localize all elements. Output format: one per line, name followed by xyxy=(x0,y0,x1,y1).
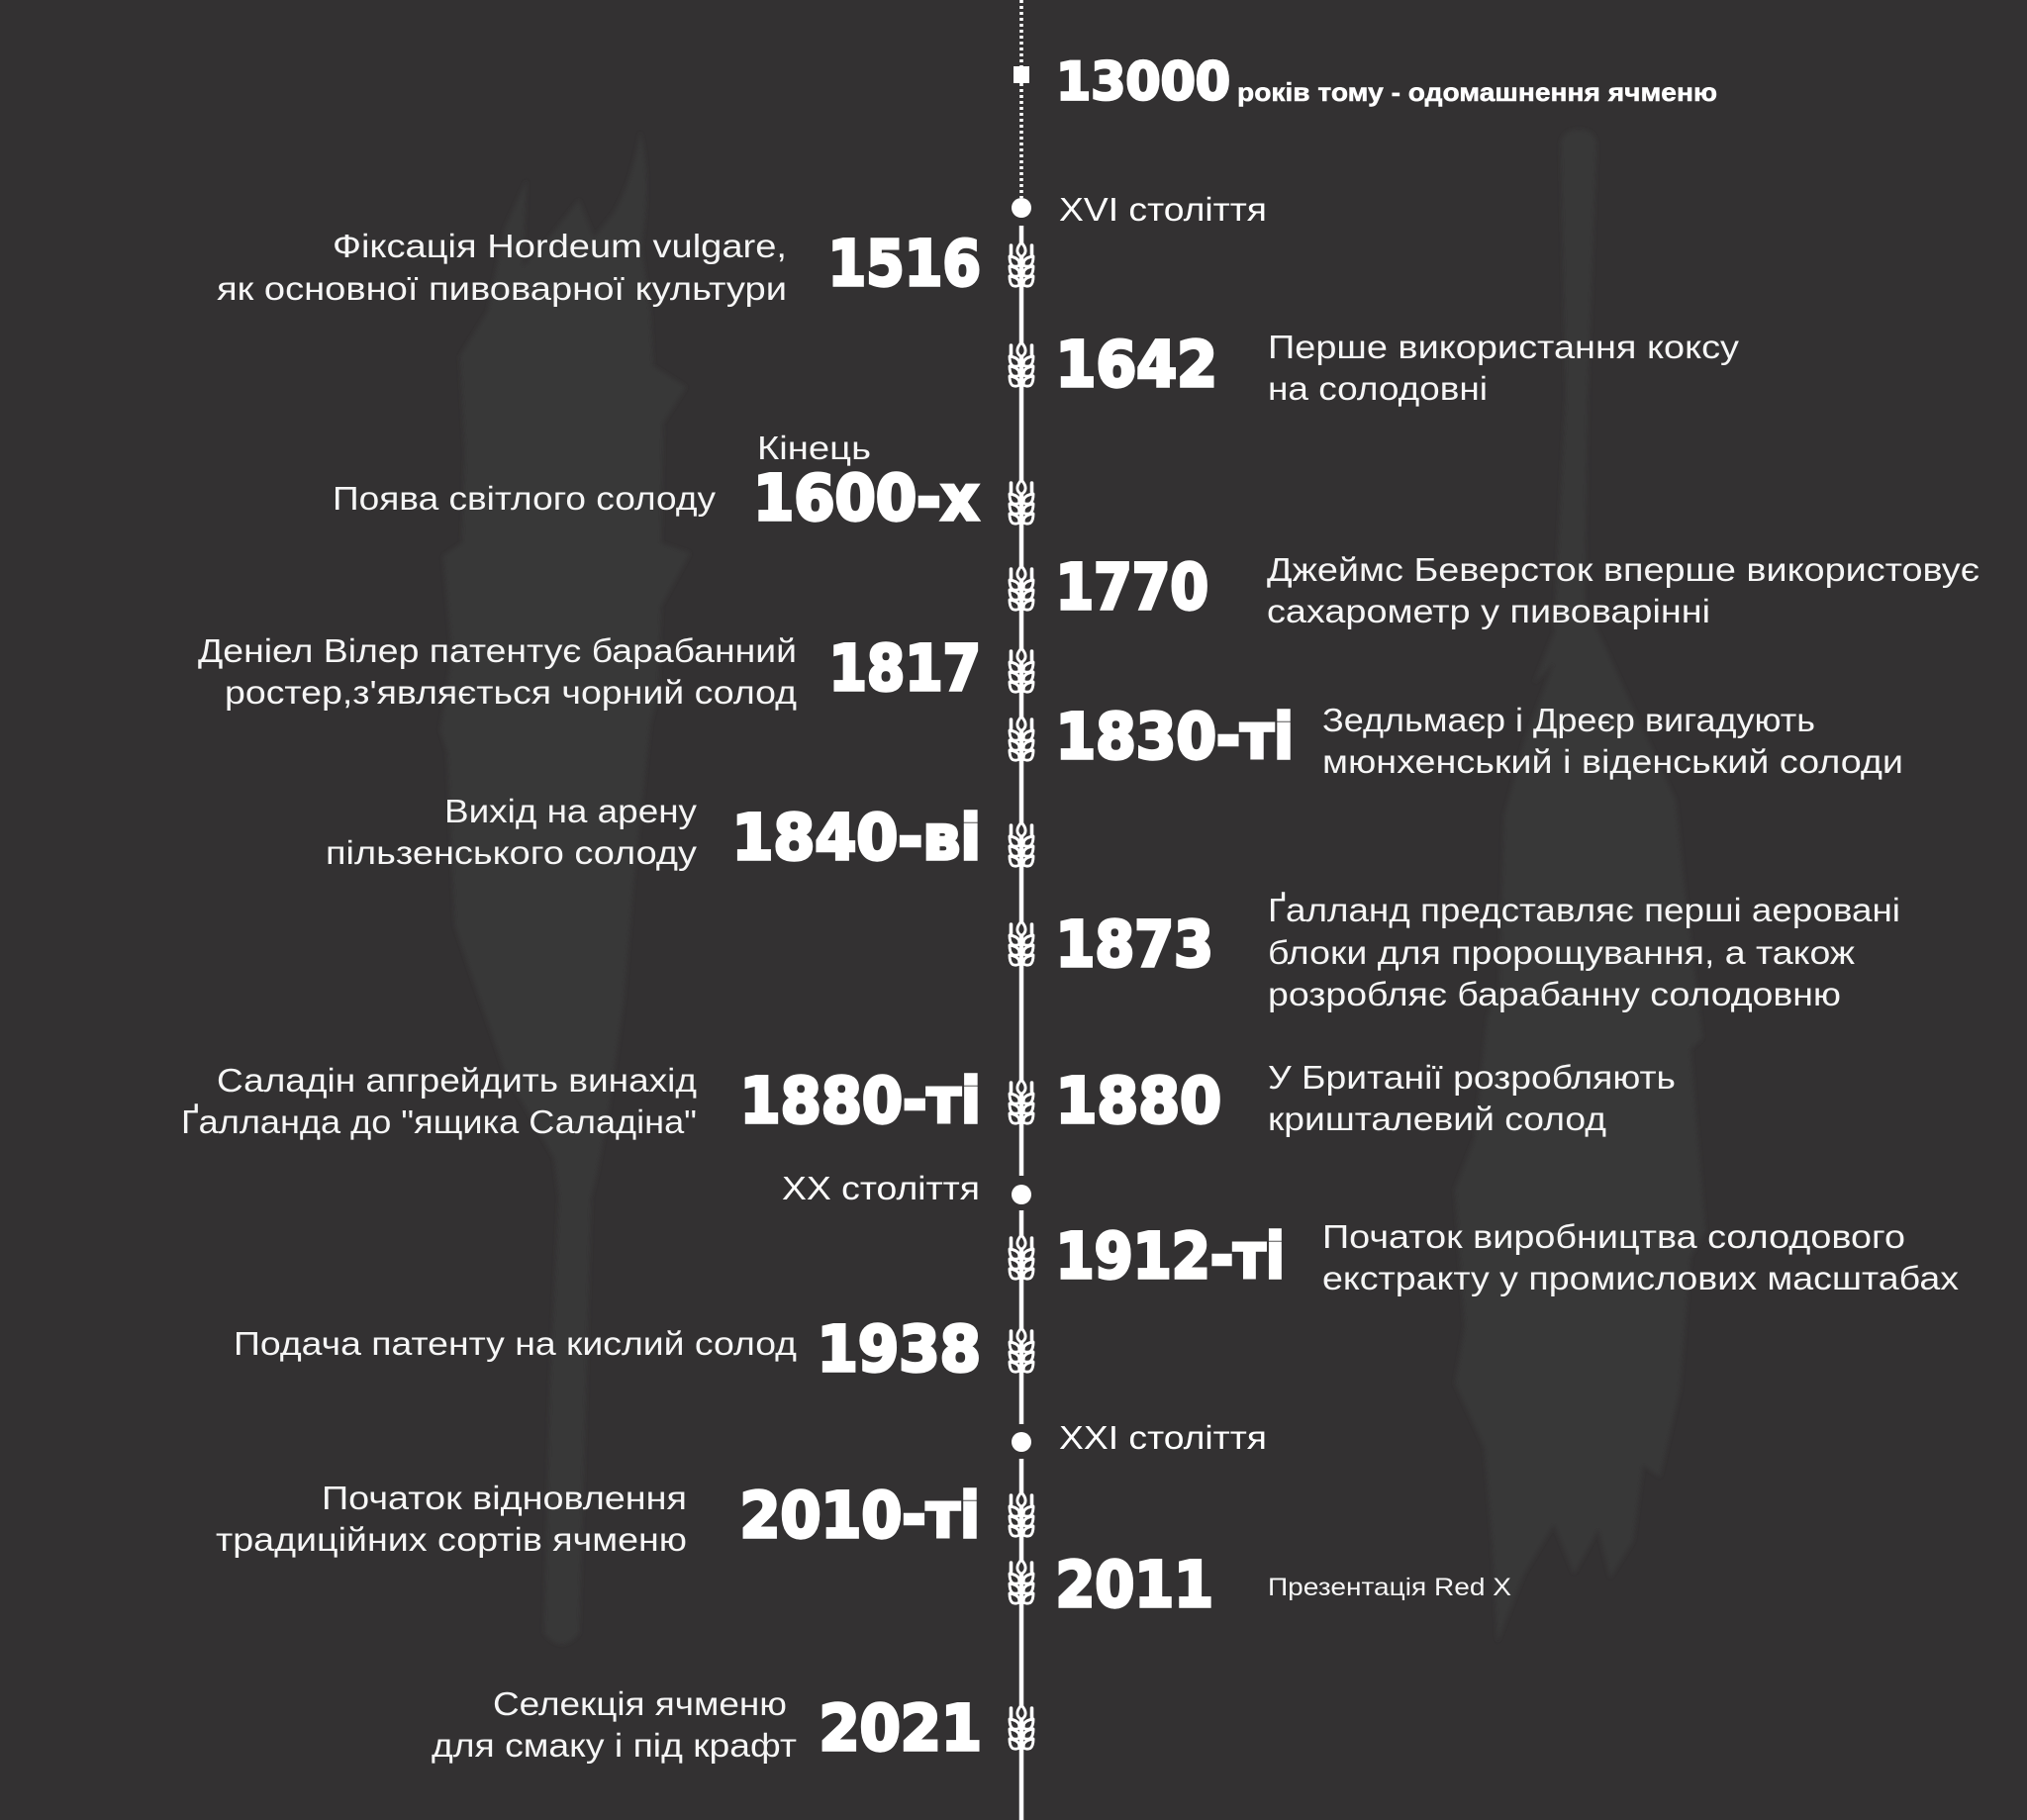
event: 1770: 1770 xyxy=(1055,551,1208,623)
event: 1880s and 1880 xyxy=(181,1059,1676,1140)
event: 1880s and 1880: кришталевий солод xyxy=(1268,1101,1606,1137)
event: 1840s xyxy=(326,793,1033,874)
event: 2021: 2021 xyxy=(820,1692,982,1765)
event: 1873: блоки для пророщування, а також xyxy=(1268,934,1855,971)
event: 1873: 1873 xyxy=(1055,909,1213,981)
century marker: XVI: XVI століття xyxy=(1059,191,1267,228)
decorative wheat ear, left xyxy=(440,132,690,1644)
event: 13000 years ago: років тому - одомашнення ячменю xyxy=(1237,77,1717,107)
event: 1873: розробляє барабанну солодовню xyxy=(1268,976,1841,1012)
event: 1770: Джеймс Беверсток вперше використовує xyxy=(1267,551,1979,588)
event: 1642 xyxy=(1010,329,1740,407)
event: 1912s xyxy=(1010,1218,1960,1296)
event: 1830s: 1830-ті xyxy=(1055,701,1294,773)
event: 2010s: 2010-ті xyxy=(740,1480,980,1552)
event: 1912s: Початок виробництва солодового xyxy=(1322,1218,1905,1255)
event: 1912s: 1912-ті xyxy=(1055,1220,1285,1293)
event: 2010s xyxy=(216,1480,1033,1558)
event: 1912s: екстракту у промислових масштабах xyxy=(1322,1260,1960,1296)
event: 2021: Селекція ячменю xyxy=(493,1685,787,1722)
event: 1840s: Вихід на арену xyxy=(444,793,698,829)
event: 2010s: традиційних сортів ячменю xyxy=(216,1521,687,1558)
event: 1880s and 1880: 1880-ті xyxy=(740,1065,981,1137)
event: 1642: Перше використання коксу xyxy=(1268,329,1740,365)
event: 1770 xyxy=(1010,551,1979,629)
event: late 1600s: Кінець xyxy=(757,430,871,466)
event: 1770: сахарометр у пивоварінні xyxy=(1267,593,1710,629)
event: 1817: 1817 xyxy=(829,632,981,705)
century marker: XXI: XXI століття xyxy=(1059,1419,1267,1456)
event: 13000 years ago: 13000 xyxy=(1056,51,1230,113)
event: 1516 xyxy=(217,228,1033,307)
event: late 1600s: 1600-х xyxy=(753,462,979,534)
event: 2011: Презентація Red X xyxy=(1268,1574,1511,1601)
event: 1880s and 1880: 1880 xyxy=(1055,1065,1221,1137)
event: 1938: 1938 xyxy=(818,1313,981,1386)
event: 1840s: пільзенського солоду xyxy=(326,834,698,871)
event: 1880s and 1880: Ґалланда до "ящика Саладіна" xyxy=(181,1103,697,1140)
event: 1817: ростер,з'являється чорний солод xyxy=(225,674,797,711)
event: 1938 xyxy=(234,1313,1033,1386)
event: 1873 xyxy=(1010,892,1900,1012)
event: 1880s and 1880: Саладін апгрейдить винахід xyxy=(217,1062,697,1099)
event: 1830s: Зедльмаєр і Дреєр вигадують xyxy=(1322,702,1815,738)
event: 1840s: 1840-ві xyxy=(732,802,981,874)
event: 2011: 2011 xyxy=(1055,1549,1213,1621)
century marker: XX: ХХ століття xyxy=(782,1170,980,1206)
event: 2021: для смаку і під крафт xyxy=(432,1727,797,1764)
event: 13000 years ago xyxy=(1014,51,1717,113)
event: 1516: як основної пивоварної культури xyxy=(217,270,787,307)
decorative wheat ear, right xyxy=(1455,130,1705,1642)
event: 1516: 1516 xyxy=(827,228,981,300)
event: 1830s xyxy=(1010,701,1903,780)
event: 2021 xyxy=(432,1685,1033,1765)
event: 1642: 1642 xyxy=(1055,329,1217,401)
event: 2010s: Початок відновлення xyxy=(322,1480,687,1516)
event: 1880s and 1880: У Британії розробляють xyxy=(1268,1059,1676,1096)
event: late 1600s: Поява світлого солоду xyxy=(333,480,717,517)
event: 1516: Фіксація Hordeum vulgare, xyxy=(333,228,787,264)
event: 1817: Деніел Вілер патентує барабанний xyxy=(198,632,797,669)
event: 2011 xyxy=(1010,1549,1511,1621)
event: 1938: Подача патенту на кислий солод xyxy=(234,1325,797,1362)
event: 1830s: мюнхенський і віденський солоди xyxy=(1322,743,1903,780)
event: 1817 xyxy=(198,632,1033,711)
timeline axis xyxy=(1019,0,1023,1820)
event: 1642: на солодовні xyxy=(1268,370,1488,407)
event: 1873: Ґалланд представляє перші аеровані xyxy=(1268,892,1900,928)
event: late 1600s xyxy=(333,430,1033,534)
